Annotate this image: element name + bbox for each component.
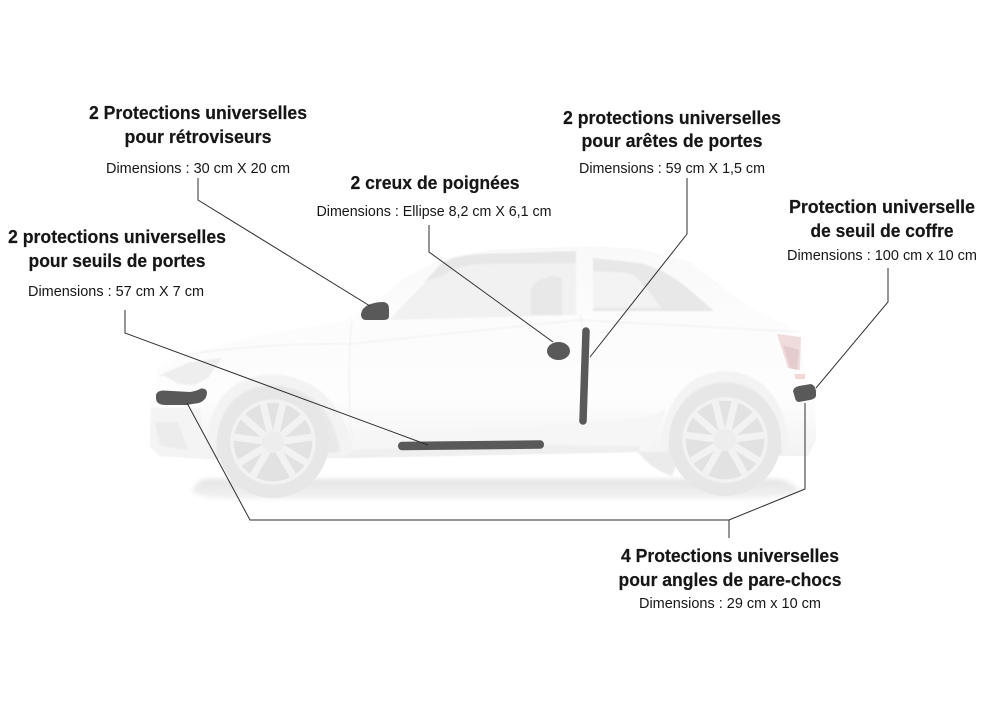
label: mirrors: 2 Protections universelles — [89, 102, 307, 123]
protection: door sill — [398, 440, 544, 450]
front wheel arch — [206, 374, 354, 459]
label: bumper corners: 4 Protections universelles — [621, 545, 839, 566]
lower door shade — [342, 410, 666, 458]
car body — [150, 246, 816, 459]
inner arch rear — [668, 382, 782, 455]
label: door sills: pour seuils de portes — [28, 250, 206, 271]
label: door sills — [8, 226, 226, 300]
label: door sills: Dimensions : 57 cm X 7 cm — [28, 283, 204, 300]
label: trunk sill: Protection universelle — [789, 196, 975, 217]
front window top band — [425, 251, 576, 281]
label: bumper corners — [618, 545, 842, 612]
label: trunk sill: Dimensions : 100 cm x 10 cm — [787, 247, 977, 264]
rear tyre shadow — [638, 452, 682, 476]
label: handle recesses — [316, 172, 552, 220]
rear wheel — [669, 384, 781, 496]
door lines — [185, 315, 800, 450]
protection: front bumper corner — [156, 388, 207, 405]
label: mirrors: Dimensions : 30 cm X 20 cm — [106, 160, 290, 177]
rear wheel arch — [660, 371, 790, 455]
label: trunk sill: de seuil de coffre — [810, 220, 954, 241]
label: door sills: 2 protections universelles — [8, 226, 226, 247]
inner arch front — [216, 385, 340, 459]
seat — [531, 276, 562, 315]
front wheel — [217, 386, 329, 498]
label: door edges: 2 protections universelles — [563, 107, 781, 128]
tail light — [777, 334, 801, 370]
leader lines — [125, 178, 888, 538]
protection: mirror — [361, 302, 389, 320]
label: bumper corners: pour angles de pare-chocs — [618, 569, 842, 590]
protection: door handle recess — [547, 342, 570, 360]
front bumper — [150, 408, 206, 458]
protection: rear bumper corner — [793, 384, 816, 402]
ground shadow — [192, 479, 800, 499]
rear window surround — [593, 258, 714, 311]
sill — [342, 445, 640, 458]
grille — [155, 422, 188, 450]
label: handle recesses: Dimensions : Ellipse 8,2 cm X 6,1 cm — [316, 203, 552, 220]
headlight — [158, 358, 222, 385]
protection: door edge — [583, 331, 586, 421]
label: mirrors: pour rétroviseurs — [124, 126, 272, 147]
label: trunk sill — [787, 196, 977, 264]
label: bumper corners: Dimensions : 29 cm x 10 cm — [639, 595, 821, 612]
label: door edges: pour arêtes de portes — [582, 130, 762, 151]
label: handle recesses: 2 creux de poignées — [350, 172, 520, 193]
label: mirrors — [89, 102, 307, 177]
rear window glass — [593, 271, 661, 308]
car illustration — [150, 246, 816, 499]
front window — [389, 253, 576, 320]
tail light inner — [783, 345, 799, 370]
reflector — [794, 374, 805, 379]
label: door edges — [563, 107, 781, 177]
car details — [150, 251, 800, 476]
label: door edges: Dimensions : 59 cm X 1,5 cm — [579, 160, 765, 177]
